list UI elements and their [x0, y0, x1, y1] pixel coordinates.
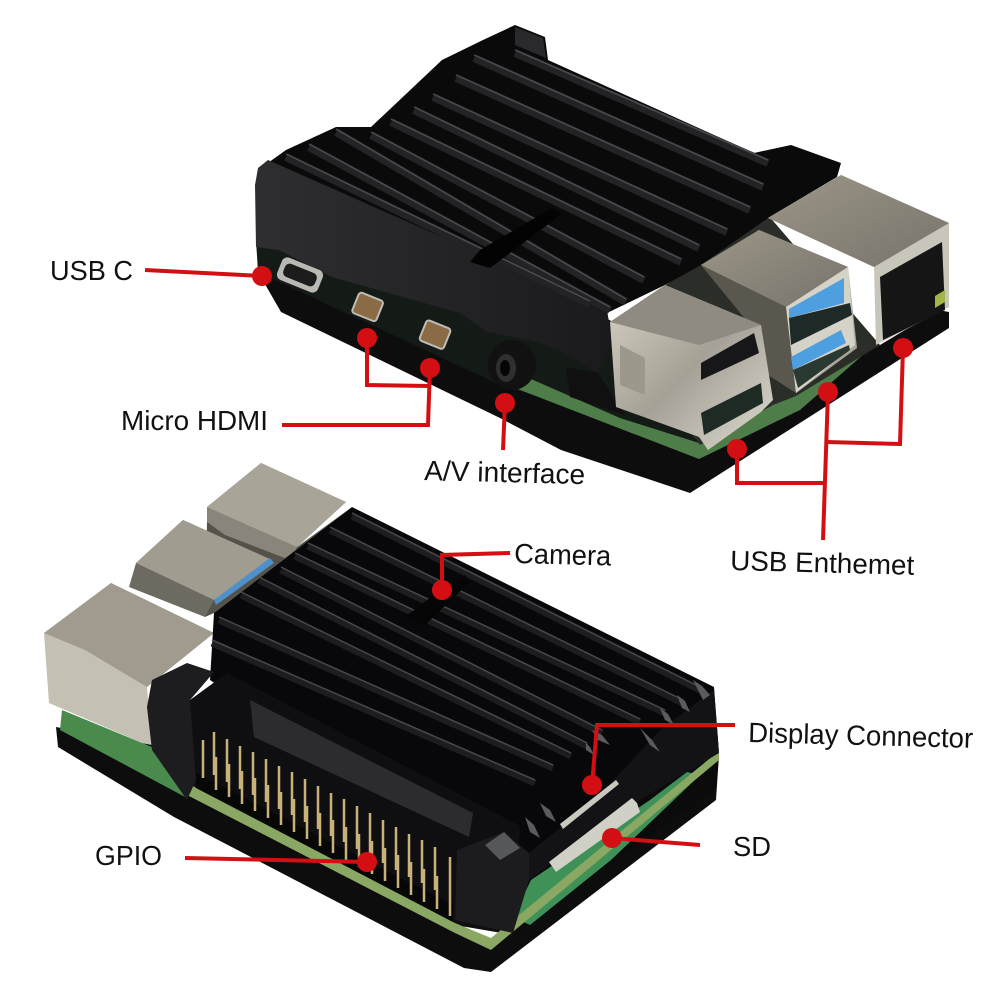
micro HDMI ports [351, 292, 451, 350]
top end tab [515, 27, 546, 58]
Ethernet port [768, 175, 949, 345]
corner block [455, 832, 529, 933]
camera slot [405, 575, 470, 625]
Ethernet block [44, 583, 214, 747]
heat sink fins [212, 513, 700, 783]
GPIO recess [187, 673, 520, 935]
green and yellow board edge [187, 750, 719, 950]
green circuit board edge [515, 340, 880, 459]
USB 2 port [207, 463, 346, 560]
end fin chamfers [525, 680, 710, 838]
callout: Display Connector: Display Connector [748, 717, 974, 754]
case lower right leg [566, 367, 625, 415]
callout: Camera [432, 538, 612, 600]
USB 3 ports [701, 230, 857, 393]
heat sink fins [286, 50, 768, 310]
shadow behind the port blocks [610, 215, 880, 445]
case top with fins [210, 507, 719, 880]
callout: USB C: USB C [50, 255, 133, 286]
callout: SD: SD [733, 831, 771, 862]
GPIO pin bases [196, 773, 453, 922]
top device: Raspberry Pi in case, port side [255, 25, 949, 493]
callout: Micro HDMI: Micro HDMI [121, 405, 268, 436]
green board right end [513, 772, 700, 925]
callout: GPIO [95, 840, 377, 872]
callout: A/V interface [424, 393, 586, 490]
acrylic base [56, 727, 719, 972]
left end block [147, 663, 214, 800]
A/V jack [488, 340, 536, 390]
central groove [470, 208, 562, 268]
acrylic base plate [258, 272, 949, 493]
callout: USB Enthemet: USB Enthemet [730, 545, 915, 581]
callout: Camera: Camera [514, 538, 612, 572]
display connector ribbon [560, 780, 619, 829]
SD slot [549, 798, 640, 872]
end face [529, 690, 719, 880]
USB 3 port [129, 520, 274, 617]
case front face [255, 160, 612, 373]
callout: USB C [50, 255, 272, 286]
green board left edge [60, 710, 187, 798]
GPIO pins [203, 732, 450, 916]
callout: USB Enthemet [727, 338, 915, 581]
callout: Micro HDMI [121, 328, 440, 436]
ribbed recess wall [250, 700, 473, 837]
case top with fins [258, 25, 841, 313]
USB C port [275, 256, 325, 294]
callout: Display Connector [582, 717, 974, 795]
shadowed port area behind the board edge [256, 240, 700, 445]
shadow between the USB blocks and case [205, 507, 352, 617]
bottom device: Raspberry Pi in case, GPIO side [44, 463, 719, 972]
callout: SD [602, 828, 771, 862]
callout: GPIO: GPIO [95, 840, 162, 871]
USB 2 ports [610, 285, 773, 450]
right side backing [491, 690, 719, 945]
callout: A/V interface: A/V interface [424, 455, 586, 490]
